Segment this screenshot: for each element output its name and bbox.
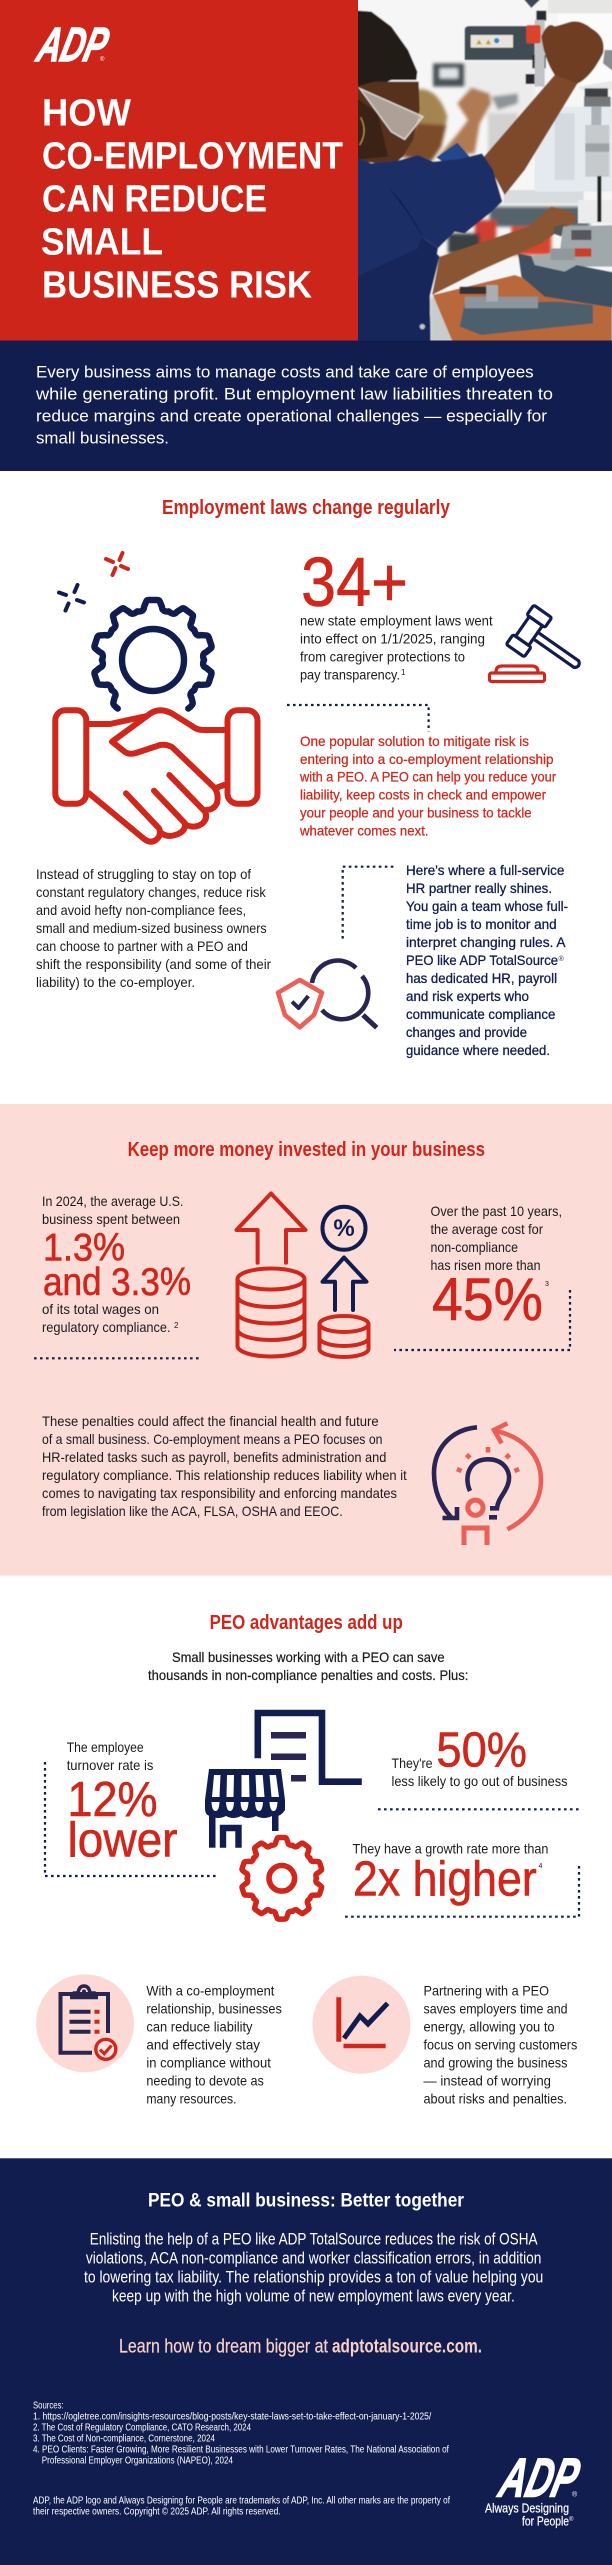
stat block: 45%: 45% (432, 1266, 543, 1333)
text: new state laws (300, 612, 493, 682)
card text: focus on serving customers (424, 2036, 577, 2052)
card text: and growing the business (424, 2054, 568, 2070)
sources (33, 2400, 449, 2466)
call to action: adptotalsource.com. (332, 2337, 482, 2358)
icon: red gear (240, 1838, 324, 1919)
text: instead of struggling: constant regulatory changes, reduce risk (36, 884, 267, 900)
sources: 3. The Cost of Non-compliance, Cornerstone, 2024 (33, 2433, 215, 2444)
icon: idea cycle (434, 1423, 541, 1545)
card text: needing to devote as (146, 2072, 264, 2088)
stat block: 1.3% and 3.3%: regulatory compliance. (42, 1319, 171, 1335)
heading: Keep more money invested in your business (128, 1139, 485, 1161)
text: instead of struggling: can choose to partner with a PEO and (36, 938, 248, 954)
text: full-service HR partner: communicate compliance (406, 1006, 556, 1022)
icon: growth chart (339, 1997, 388, 2046)
text: penalties: These penalties could affect the financial health and future (42, 1413, 379, 1429)
intro text: Every business aims to manage costs and take care of employees (36, 363, 534, 382)
text: new state laws: into effect on 1/1/2025, ranging (300, 630, 485, 646)
stat: 2x higher: They have a growth rate more than (352, 1840, 548, 1856)
text: full-service HR partner: You gain a team whose full- (406, 898, 568, 914)
heading: Employment laws change regularly (162, 497, 451, 519)
text: penalties: HR-related tasks such as payroll, benefits administration and (42, 1449, 386, 1465)
icon: storefront (205, 1769, 285, 1848)
stat block: 1.3% and 3.3%: of its total wages on (42, 1301, 159, 1317)
text: new state laws: new state employment laws went (300, 612, 493, 628)
text: full-service HR partner: interpret changing rules. A (406, 934, 566, 950)
dotted connector (45, 1762, 217, 1876)
icon: clipboard (60, 1986, 116, 2059)
card text: and effectively stay (146, 2036, 260, 2052)
title: CAN REDUCE (42, 177, 267, 220)
text: full-service HR partner: PEO like ADP TotalSource (406, 952, 558, 968)
stat: 12% lower: 12% (68, 1773, 158, 1827)
heading: PEO & small business: Better together (148, 2191, 465, 2212)
sources: 2. The Cost of Regulatory Compliance, CATO Research, 2024 (33, 2422, 251, 2433)
stat: 2x higher: 4 (538, 1863, 542, 1870)
dotted connector (394, 1290, 570, 1350)
text: save thousands: thousands in non-compliance penalties and costs. Plus: (148, 1667, 468, 1683)
text: penalties (42, 1413, 407, 1519)
stat block: 1.3% and 3.3%: 1.3% (43, 1227, 125, 1270)
sources: 4. PEO Clients: Faster Growing, More Resilient Businesses with Lower Turnover Rates, The National Association of (33, 2444, 449, 2455)
stat block: 45% (430, 1203, 562, 1333)
closing paragraph (84, 2230, 543, 2306)
title: SMALL (41, 220, 163, 263)
icon: gear and handshake (55, 600, 257, 842)
text: popular solution: whatever comes next. (299, 823, 429, 839)
card text: Partnering with a PEO (424, 1982, 549, 1998)
text: penalties: regulatory compliance. This relationship reduces liability when it (42, 1467, 407, 1483)
stat block: 1.3% and 3.3%: 2 (174, 1321, 179, 1330)
text: instead of struggling: Instead of struggling to stay on top of (36, 866, 251, 882)
logo: ADP Always Designing for People: ® (572, 2491, 578, 2499)
card text: — instead of worrying (424, 2072, 551, 2088)
dotted rule (34, 1357, 202, 1359)
panel: employment laws change regularly (36, 497, 592, 1058)
logo: ADP Always Designing for People: ® (569, 2516, 574, 2523)
panel: keep more money invested (0, 1104, 612, 1576)
stat block: 45%: non-compliance (430, 1239, 518, 1255)
logo: ADP Always Designing for People: Always Designing (485, 2500, 569, 2515)
dotted rule (378, 1808, 580, 1810)
intro text: while generating profit. But employment law liabilities threaten to (35, 385, 553, 404)
text: full-service HR partner: time job is to monitor and (406, 916, 557, 932)
stat block: 1.3% and 3.3% (42, 1193, 191, 1335)
stat block: 45%: Over the past 10 years, (430, 1203, 562, 1219)
intro text: small businesses. (36, 429, 169, 448)
text: penalties: of a small business. Co-employment means a PEO focuses on (42, 1431, 382, 1447)
text: popular solution: your people and your business to tackle (300, 805, 532, 821)
text: full-service HR partner: ® (558, 955, 564, 963)
logo: ADP: ADP (32, 19, 114, 72)
text: full-service HR partner: has dedicated HR, payroll (406, 970, 557, 986)
icon: gavel (490, 605, 592, 685)
stat block: 1.3% and 3.3%: In 2024, the average U.S. (42, 1193, 184, 1209)
title: BUSINESS RISK (42, 263, 312, 306)
stat: 50%: They're (392, 1755, 433, 1771)
text: full-service HR partner: guidance where needed. (406, 1042, 550, 1058)
card: saves time (312, 1976, 577, 2106)
text: popular solution: with a PEO. A PEO can help you reduce your (299, 769, 556, 785)
logo: ADP Always Designing for People: for People (522, 2514, 569, 2529)
text: save thousands: Small businesses working with a PEO can save (172, 1649, 445, 1665)
text: popular solution: liability, keep costs in check and empower (300, 787, 546, 803)
icon: rising coins and percentage: % (333, 1215, 355, 1242)
card text: energy, allowing you to (424, 2018, 555, 2034)
icon: shield and magnifier (278, 961, 377, 1028)
sources: Professional Employer Organizations (NAPEO), 2024 (42, 2455, 233, 2466)
intro text: reduce margins and create operational challenges — especially for (36, 407, 547, 426)
text: penalties: from legislation like the ACA, FLSA, OSHA and EEOC. (42, 1503, 343, 1519)
panel: PEO advantages add up (36, 1612, 580, 2106)
call to action (119, 2337, 482, 2358)
title: CO-EMPLOYMENT (42, 134, 343, 177)
title: HOW (42, 92, 132, 135)
card text: With a co-employment (146, 1982, 274, 1998)
card: reduce liability (36, 1974, 282, 2106)
icon: rising coins and percentage (236, 1194, 368, 1357)
text: instead of struggling: and avoid hefty non-compliance fees, (36, 902, 246, 918)
text: full-service HR partner: and risk experts who (406, 988, 529, 1004)
stat: 34+: 34+ (301, 543, 408, 621)
card text: many resources. (146, 2090, 236, 2106)
text: new state laws: from caregiver protections to (300, 648, 465, 664)
sources: 1. https://ogletree.com/insights-resources/blog-posts/key-state-laws-set-to-take-effect-on-january-1-2025/ (33, 2411, 431, 2422)
text: instead of struggling: shift the responsibility (and some of their (36, 956, 271, 972)
card text: saves employers time and (424, 2000, 568, 2016)
stat block: 1.3% and 3.3%: business spent between (42, 1211, 180, 1227)
stat: 2x higher: 2x higher (353, 1853, 537, 1907)
icon: sparkles (59, 553, 128, 610)
legal (33, 2495, 450, 2517)
card text (146, 1982, 282, 2106)
stat: 12% lower: turnover rate is (67, 1757, 153, 1773)
card text: in compliance without (146, 2054, 271, 2070)
stat block: 45%: 3 (545, 1281, 549, 1288)
sources: Sources: (33, 2400, 64, 2411)
stat: 12% lower: lower (68, 1814, 178, 1868)
stat: 50% (392, 1724, 568, 1789)
dotted connector (343, 867, 393, 942)
text: penalties: comes to navigating tax responsibility and enforcing mandates (42, 1485, 397, 1501)
card text (424, 1982, 577, 2106)
text: new state laws: 1 (401, 668, 406, 677)
text: full-service HR partner (406, 862, 568, 1058)
intro text (35, 363, 553, 448)
panel: footer (0, 2158, 612, 2565)
text: full-service HR partner: Here's where a full-service (406, 862, 565, 878)
stat: 12% lower: The employee (67, 1739, 144, 1755)
legal: their respective owners. Copyright © 2025 ADP. All rights reserved. (33, 2506, 281, 2517)
panel: intro (0, 340, 612, 471)
text: popular solution: entering into a co-employment relationship (300, 751, 554, 767)
text: instead of struggling (36, 866, 271, 990)
heading: PEO advantages add up (210, 1612, 403, 1634)
title (41, 92, 343, 306)
logo: ADP Always Designing for People (485, 2446, 586, 2529)
text: instead of struggling: liability) to the co-employer. (36, 974, 195, 990)
text: popular solution (299, 733, 556, 839)
text: full-service HR partner: changes and provide (406, 1024, 527, 1040)
text: instead of struggling: small and medium-sized business owners (36, 920, 267, 936)
logo: ADP: ® (100, 56, 105, 63)
text: save thousands (148, 1649, 468, 1683)
card text: can reduce liability (146, 2018, 252, 2034)
text: new state laws: pay transparency. (300, 666, 400, 682)
legal: ADP, the ADP logo and Always Designing for People are trademarks of ADP, Inc. All other marks are the property of (33, 2495, 450, 2506)
stat block: 45%: the average cost for (430, 1221, 543, 1237)
text: popular solution: One popular solution to mitigate risk is (300, 733, 529, 749)
stat: 50%: 50% (436, 1724, 527, 1778)
panel: header (0, 0, 612, 347)
icon: document (258, 1713, 362, 1782)
photo: worker at a drill press (350, 0, 612, 347)
card text: relationship, businesses (146, 2000, 282, 2016)
call to action: Learn how to dream bigger at (119, 2337, 329, 2358)
dotted connector (343, 1866, 579, 1917)
card text: about risks and penalties. (424, 2090, 567, 2106)
stat block: 1.3% and 3.3%: and 3.3% (43, 1261, 191, 1304)
stat block: 45%: has risen more than (430, 1257, 540, 1273)
text: full-service HR partner: HR partner really shines. (406, 880, 552, 896)
stat: 50%: less likely to go out of business (392, 1773, 568, 1789)
dotted connector (287, 705, 429, 732)
closing paragraph: keep up with the high volume of new employment laws every year. (112, 2288, 515, 2306)
stat: 12% lower (67, 1739, 178, 1868)
